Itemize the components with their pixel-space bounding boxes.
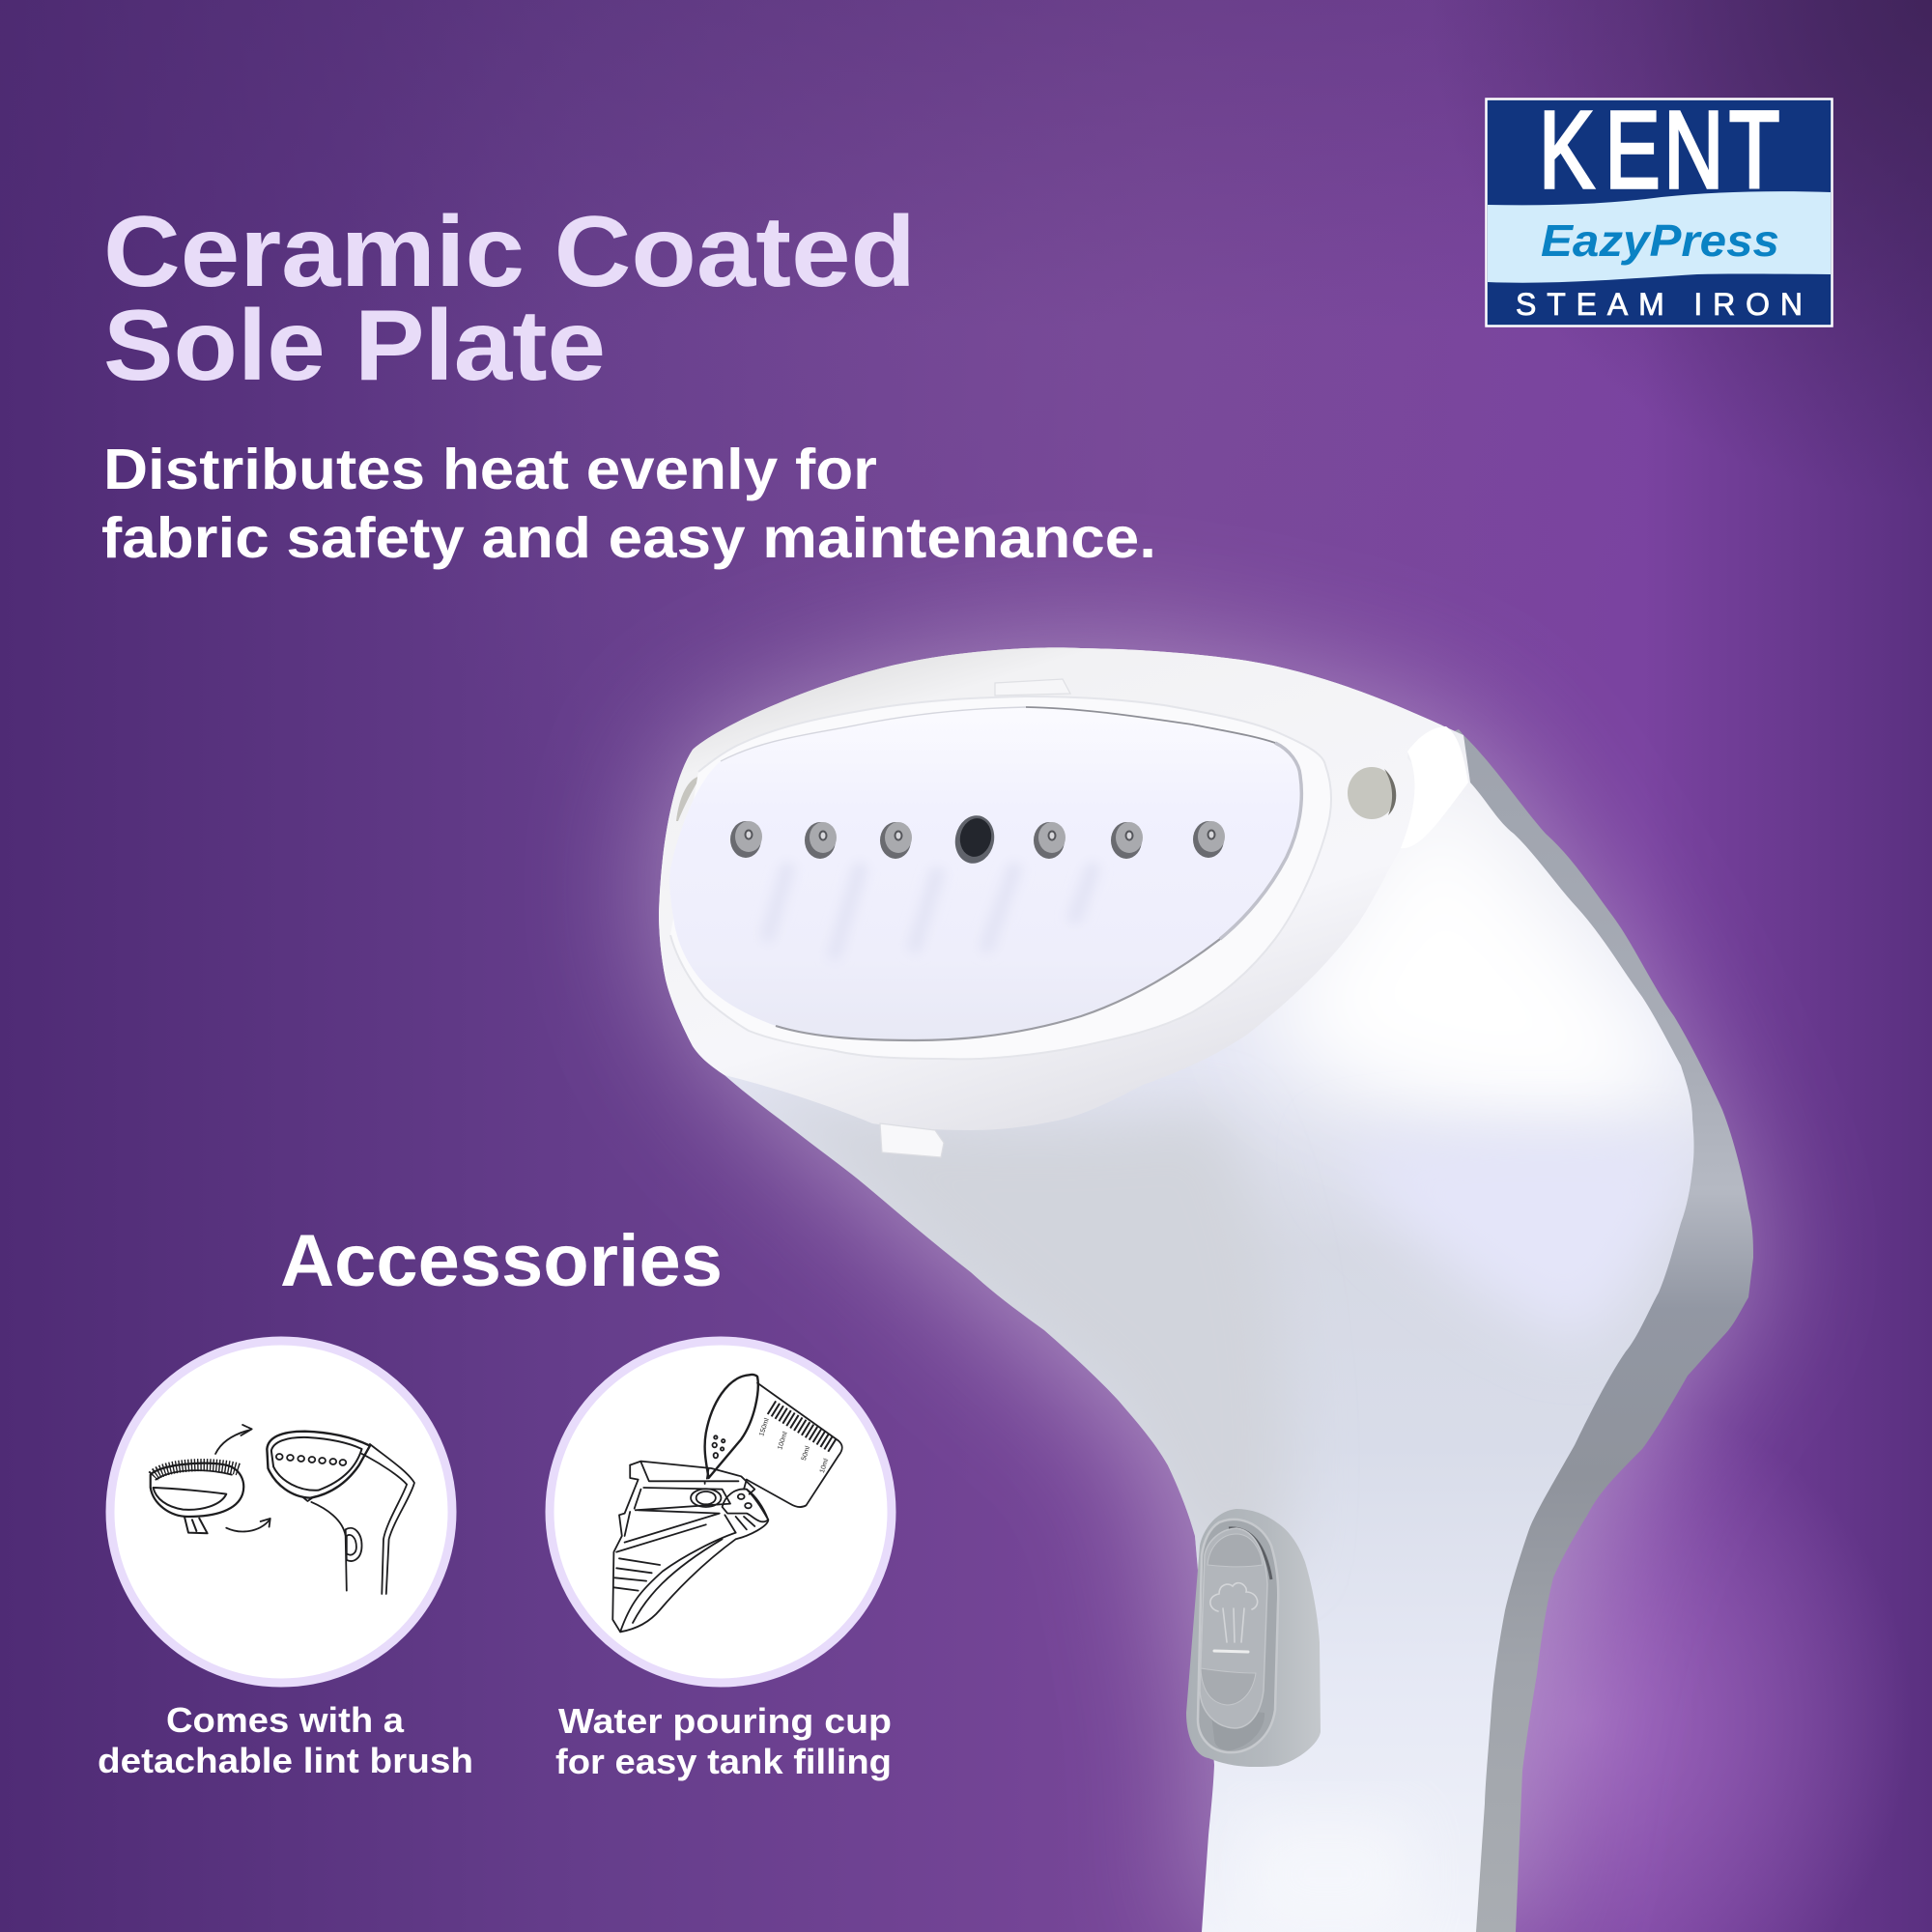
brand logo: KENT EazyPress Steam Iron: EazyPress [1541,215,1779,266]
iron side vents [676,767,1396,821]
iron white body [659,647,1694,1932]
caption: water pouring cup: for easy tank filling [555,1742,892,1781]
iron tabs [880,679,1070,1157]
cup measurement labels: 150ml [758,1417,771,1437]
caption: water pouring cup [555,1701,892,1781]
heading: accessories: Accessories [280,1220,723,1302]
accessory: water pouring cup [550,1341,892,1683]
subtitle text: fabric safety and easy maintenance. [101,506,1156,570]
subtitle text: Distributes heat evenly for [103,438,877,501]
cup measurement labels [758,1417,830,1474]
title: Ceramic Coated [103,196,916,308]
steam symbol on button [1210,1583,1258,1652]
subtitle text [101,438,1156,570]
cup measurement labels: 50ml [801,1445,811,1462]
brand logo: KENT EazyPress Steam Iron [1486,90,1832,326]
steam holes [730,811,1225,867]
title: Sole Plate [103,290,606,402]
brand logo: KENT EazyPress Steam Iron: STEAM IRON [1516,287,1803,322]
product: steam iron [659,647,1753,1932]
caption: lint brush [98,1700,473,1780]
steam button [1186,1509,1321,1767]
ceramic rim ridge [670,696,1331,1059]
title [103,196,916,402]
iron head band [659,647,1442,1130]
brand logo: KENT EazyPress Steam Iron: KENT [1539,90,1779,212]
caption: lint brush: detachable lint brush [98,1741,473,1780]
cup measurement labels: 10ml [819,1458,830,1474]
line art: cup pouring water into iron [612,1375,842,1632]
cup measurement labels: 100ml [777,1431,789,1451]
circle badge: water cup [550,1341,892,1683]
iron grey back shell [1352,729,1753,1932]
corner highlight [1401,726,1468,848]
ceramic sole plate with steam holes [669,707,1301,1040]
line art: brush and iron head [151,1425,414,1594]
caption: lint brush: Comes with a [166,1700,405,1740]
accessory: lint brush [110,1341,452,1683]
caption: water pouring cup: Water pouring cup [558,1701,892,1741]
circle badge: lint brush [110,1341,452,1683]
